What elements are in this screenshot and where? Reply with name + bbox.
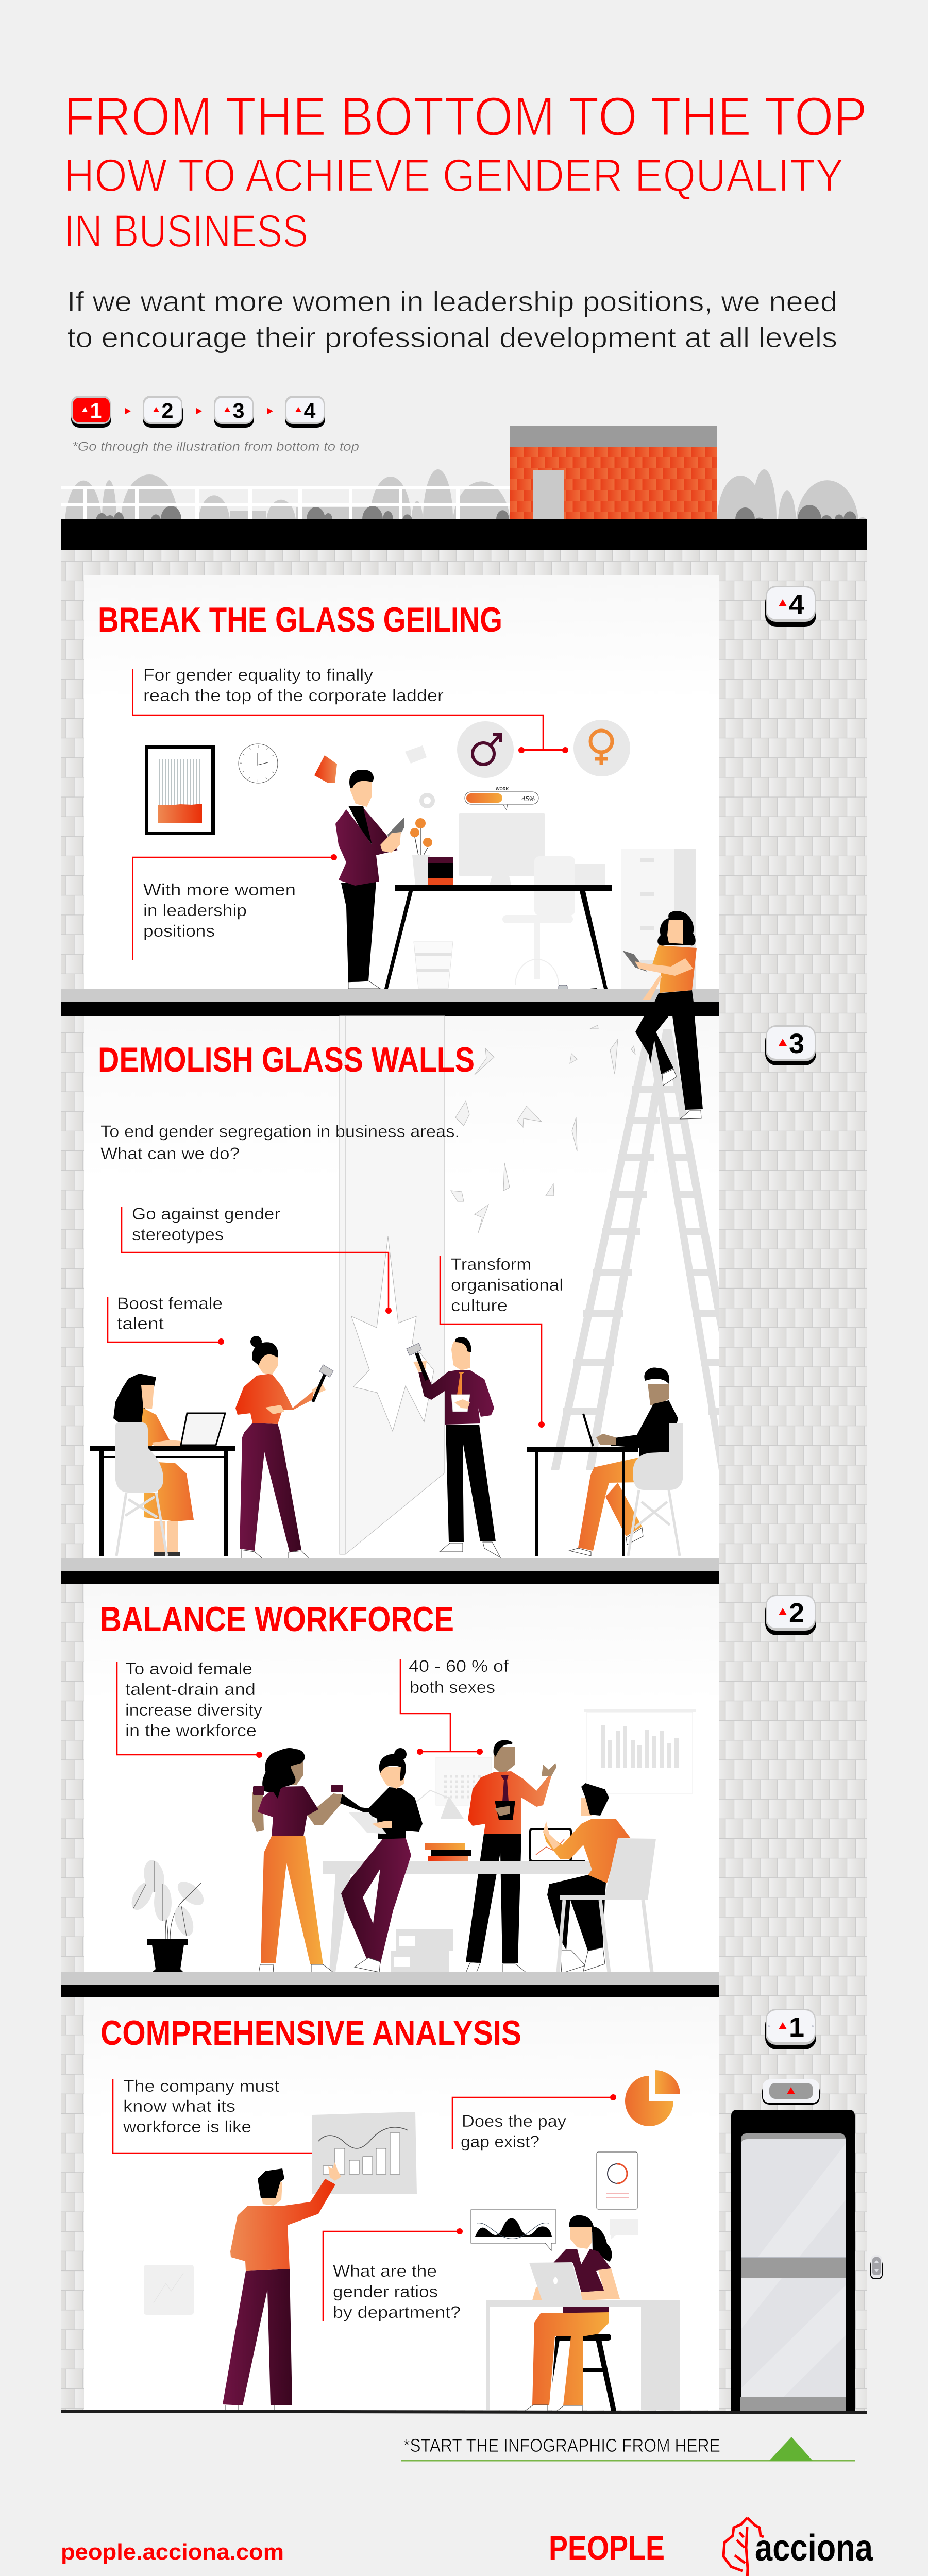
text block: leadership bbox=[143, 880, 296, 940]
callout: boost female talent: talent bbox=[117, 1314, 164, 1333]
start note: *START THE INFOGRAPHIC FROM HERE bbox=[403, 2435, 720, 2456]
desk and woman with laptop bbox=[486, 2215, 680, 2411]
heading: BALANCE WORKFORCE bbox=[100, 1600, 454, 1639]
archive boxes bbox=[391, 1929, 453, 1973]
legend: floor buttons: 1 bbox=[90, 399, 102, 422]
rooftop trees bbox=[65, 469, 867, 519]
woman with document bbox=[340, 1748, 423, 1972]
meeting table with books and laptop bbox=[323, 1829, 592, 1972]
callout: transform organisational culture: organisational bbox=[451, 1276, 563, 1294]
floor sign 3 bbox=[765, 1025, 816, 1065]
floor sign 4: 4 bbox=[789, 589, 804, 620]
floor sign 3: 3 bbox=[789, 1028, 804, 1059]
legend: floor buttons: 3 bbox=[233, 399, 244, 422]
callout: company workforce: workforce is like bbox=[123, 2117, 251, 2136]
monitor bbox=[459, 813, 545, 885]
work progress bubble: 45% bbox=[521, 795, 535, 803]
roof slab bbox=[61, 519, 867, 550]
ghost chair bbox=[502, 856, 575, 985]
callout: gender ratios: gender ratios bbox=[333, 2282, 438, 2301]
seated man with laptop bbox=[543, 1783, 656, 1973]
callout: go against gender stereotypes: Go against gender bbox=[132, 1205, 280, 1223]
glass shards bbox=[451, 1025, 635, 1233]
ground line bbox=[61, 2410, 867, 2414]
floor slab 4 bbox=[61, 989, 719, 1016]
text block: leadership: With more women bbox=[143, 880, 296, 899]
paper stack bbox=[575, 864, 605, 885]
wall bar chart bbox=[584, 1709, 696, 1793]
text block: reach the top of the corporate ladder bbox=[143, 686, 444, 705]
callout: female talent drain: talent-drain and bbox=[125, 1680, 256, 1699]
callout: pay gap bbox=[452, 2094, 616, 2151]
callout: boost female talent bbox=[108, 1294, 224, 1345]
acciona logo: acciona bbox=[755, 2528, 873, 2569]
floor sign 1 bbox=[765, 2009, 816, 2049]
elevator call button bbox=[870, 2255, 883, 2279]
text block bbox=[100, 1122, 460, 1163]
heading: BREAK THE GLASS GEILING bbox=[98, 600, 502, 639]
work progress bubble: WORK bbox=[496, 787, 509, 791]
start note bbox=[401, 2435, 855, 2462]
heading: COMPREHENSIVE ANALYSIS bbox=[100, 2013, 521, 2053]
fallen hammer bbox=[559, 985, 597, 999]
callout: female talent drain: increase diversity bbox=[125, 1701, 262, 1719]
callout: transform organisational culture bbox=[440, 1255, 563, 1428]
callout: female talent drain bbox=[117, 1659, 262, 1758]
floor sign 1: 1 bbox=[789, 2012, 804, 2043]
icon: female symbol bbox=[573, 720, 630, 776]
broken floor patch bbox=[600, 990, 714, 1001]
callout: company workforce: know what its bbox=[123, 2097, 235, 2115]
man pointing at chart bbox=[223, 2162, 341, 2411]
icon: gear bbox=[421, 795, 433, 806]
legend: floor buttons: 4 bbox=[304, 399, 316, 422]
floor slab 3 bbox=[61, 1558, 719, 1584]
floor sign 4 bbox=[765, 586, 816, 627]
callout: gender ratios: by department? bbox=[333, 2303, 461, 2321]
man with tablet bbox=[335, 770, 404, 989]
callout line to gender symbols bbox=[133, 669, 568, 753]
callout: 40-60 percent: both sexes bbox=[410, 1678, 495, 1697]
elevator bbox=[731, 2110, 855, 2411]
subtitle: If we want more women in leadership positions, we need bbox=[67, 285, 837, 317]
callout: transform organisational culture: culture bbox=[451, 1296, 508, 1315]
seated man at laptop bbox=[527, 1367, 683, 1556]
subtitle bbox=[67, 285, 837, 353]
callout: 40-60 percent bbox=[400, 1657, 509, 1755]
callout line: more women in leadership bbox=[133, 854, 337, 960]
phone with ring chart bbox=[597, 2152, 637, 2209]
panel: floor 1 comprehensive analysis bbox=[84, 1997, 719, 2411]
callout: gender ratios bbox=[323, 2228, 463, 2321]
wall picture bbox=[145, 745, 215, 835]
elevator indicator bbox=[762, 2079, 820, 2105]
floor slab 2 bbox=[61, 1972, 719, 1997]
panel: floor 3 demolish glass walls bbox=[84, 1016, 719, 1562]
ghost chart card bbox=[144, 2265, 194, 2315]
legend note: *Go through the illustration from bottom to top bbox=[72, 439, 359, 454]
filing cabinet bbox=[621, 849, 696, 989]
text block: leadership: positions bbox=[143, 922, 215, 940]
icon: clock bbox=[239, 744, 278, 783]
rooftop railing bbox=[61, 486, 510, 519]
callout: female talent drain: To avoid female bbox=[125, 1659, 252, 1678]
callout: go against gender stereotypes: stereotypes bbox=[132, 1225, 224, 1244]
ladder bbox=[551, 1029, 719, 1470]
callout: pay gap: gap exist? bbox=[461, 2132, 539, 2151]
woman on ladder: legs bbox=[635, 1016, 703, 1119]
callout: transform organisational culture: Transform bbox=[451, 1255, 531, 1274]
callout: go against gender stereotypes bbox=[122, 1205, 392, 1314]
floor sign 2: 2 bbox=[789, 1598, 804, 1629]
woman with curly hair bbox=[252, 1748, 344, 1973]
subtitle: to encourage their professional development at all levels bbox=[67, 321, 837, 353]
potted plant bbox=[127, 1858, 208, 1973]
text block: To end gender segregation in business areas. bbox=[100, 1122, 460, 1141]
pie chart bbox=[625, 2070, 680, 2126]
people label: PEOPLE bbox=[549, 2529, 665, 2567]
legend: floor buttons bbox=[71, 396, 325, 428]
legend: floor buttons: 2 bbox=[162, 399, 173, 422]
building brick wall bbox=[61, 550, 867, 2411]
callout: pay gap: Does the pay bbox=[462, 2112, 566, 2130]
plant and books on desk bbox=[410, 818, 453, 885]
wall chart panel bbox=[312, 2112, 417, 2194]
heading: DEMOLISH GLASS WALLS bbox=[98, 1040, 475, 1079]
work progress bubble bbox=[465, 787, 538, 810]
title bbox=[64, 86, 867, 257]
icon: envelope bbox=[405, 745, 427, 764]
title: FROM THE BOTTOM TO THE TOP bbox=[64, 86, 867, 147]
callout: gender ratios: What are the bbox=[333, 2262, 437, 2280]
callout: boost female talent: Boost female bbox=[117, 1294, 223, 1313]
text block bbox=[143, 666, 444, 705]
man with hammer bbox=[407, 1337, 500, 1557]
website link: people.acciona.com bbox=[61, 2539, 284, 2565]
floor sign 2 bbox=[765, 1595, 816, 1635]
panel: floor 4 break the glass ceiling bbox=[84, 575, 719, 1001]
seated woman at laptop bbox=[90, 1374, 235, 1556]
panel: floor 2 balance workforce bbox=[84, 1584, 719, 1982]
callout: female talent drain: in the workforce bbox=[125, 1721, 257, 1740]
acciona logo bbox=[723, 2518, 873, 2576]
standing man bbox=[462, 1740, 556, 1982]
broken hole in wall bbox=[351, 1236, 434, 1431]
callout: company workforce bbox=[113, 2077, 324, 2156]
woman with hammer bbox=[235, 1336, 333, 1562]
text block: For gender equality to finally bbox=[143, 666, 373, 684]
glass wall bbox=[340, 1016, 445, 1554]
waste bin bbox=[414, 942, 453, 988]
small chat bubble bbox=[610, 2219, 638, 2240]
title: IN BUSINESS bbox=[64, 205, 308, 257]
title: HOW TO ACHIEVE GENDER EQUALITY bbox=[64, 149, 843, 201]
icon: male symbol bbox=[457, 721, 514, 778]
icon: document bbox=[314, 755, 337, 783]
speech bubble chart bbox=[471, 2210, 556, 2250]
callout: company workforce: The company must bbox=[123, 2077, 279, 2095]
text block: What can we do? bbox=[100, 1144, 240, 1163]
rooftop hut bbox=[510, 426, 717, 520]
wall calendar bbox=[436, 1757, 492, 1805]
callout: 40-60 percent: 40 - 60 % of bbox=[409, 1657, 509, 1675]
desk lamp bbox=[415, 1790, 464, 1819]
text block: leadership: in leadership bbox=[143, 901, 247, 920]
desk bbox=[384, 885, 612, 989]
woman on ladder: upper body bbox=[622, 911, 697, 1002]
